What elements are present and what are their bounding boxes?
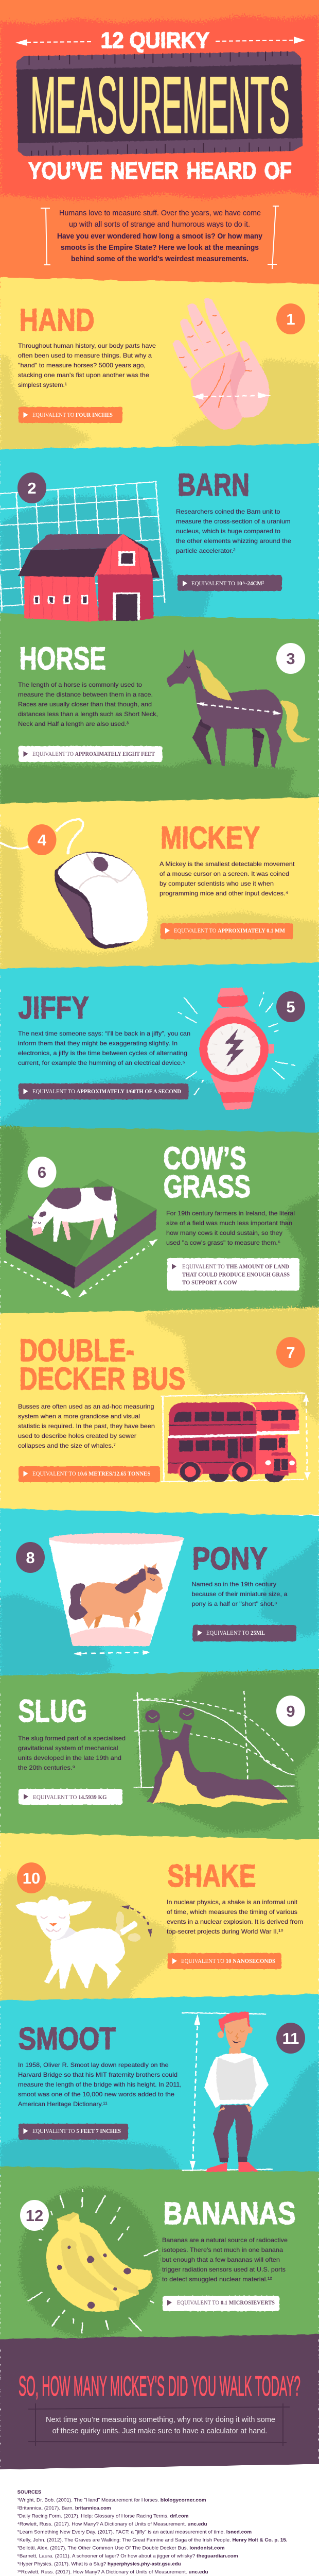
body text: often been used to measure things. But why a [18, 352, 152, 359]
heading: PONY [192, 1541, 268, 1576]
intro text block: up with all sorts of strange and humorous ways to do it. [69, 221, 250, 229]
badge: number 8: 8 [26, 1549, 35, 1567]
closing text: of these quirky units. Just make sure to have a calculator at hand. [52, 2427, 267, 2435]
body text: American Heritage Dictionary.¹¹ [18, 2100, 108, 2108]
body text: used "a cow's grass" to measure them.⁶ [166, 1239, 280, 1246]
body text: isotopes. There's not much in one banana [162, 2246, 283, 2253]
heading: BARN [178, 467, 250, 502]
callout: EQUIVALENT TO 10^-24CM² [191, 580, 264, 587]
heading: SHAKE [167, 1858, 256, 1893]
callout: EQUIVALENT TO 10 NANOSECONDS [181, 1957, 275, 1964]
badge: number 12 [20, 2200, 49, 2231]
body text [166, 1210, 295, 1246]
illustration: computer mouse [0, 819, 148, 949]
body text: For 19th century farmers in Ireland, the literal [166, 1210, 295, 1217]
body text: inform them that they might be exaggerating slightly. In [18, 1040, 178, 1047]
callout [19, 407, 122, 423]
badge: number 10 [17, 1862, 46, 1893]
body text: Named so in the 19th century [191, 1581, 276, 1588]
sources list: ²Britannica. (2017). Barn. britannica.com [17, 2505, 111, 2511]
body text: The slug formed part of a specialised [18, 1735, 126, 1742]
sources list: ⁷Bellotti, Alex. (2017). The Other Common Use Of The Double Decker Bus. londonist.com [17, 2546, 225, 2551]
body text [18, 342, 156, 388]
badge: number 6 [28, 1157, 57, 1188]
body text: Bananas are a natural source of radioactive [162, 2236, 288, 2244]
badge: number 6: 6 [38, 1163, 46, 1181]
intro text block: behind some of the world's weirdest measurements. [71, 255, 249, 263]
badge: number 2: 2 [27, 479, 37, 497]
heading: SLUG [19, 1693, 87, 1728]
body text: of time, which measures the timing of various [167, 1908, 297, 1916]
badge: number 4 [28, 824, 57, 855]
text frame [28, 2403, 290, 2446]
badge: number 5: 5 [286, 998, 295, 1016]
body text: system when a more grandiose and visual [18, 1413, 140, 1420]
badge: number 7: 7 [286, 1344, 295, 1362]
callout [19, 746, 163, 762]
body text: statistic is required. In the past, they have been [18, 1422, 155, 1430]
closing text: Next time you’re measuring something, why not try doing it with some [46, 2415, 275, 2424]
intro text block: Humans love to measure stuff. Over the years, we have come [59, 209, 261, 217]
callout [19, 2124, 128, 2140]
body text: Researchers coined the Barn unit to [176, 508, 280, 515]
body text [18, 2061, 182, 2108]
callout: EQUIVALENT TO APPROXIMATELY 1/60TH OF A SECOND [32, 1088, 181, 1095]
body text: by computer scientists who use it when [160, 880, 274, 887]
badge: number 4: 4 [38, 831, 47, 849]
sources list: ⁵Learn Something New Every Day. (2017). FACT: a "jiffy" is an actual measurement of time. lsned.com [17, 2530, 252, 2535]
body text: The length of a horse is commonly used to [18, 681, 142, 688]
body text: used to describe holes created by sewer [18, 1432, 136, 1439]
body text: nucleus, which is huge compared to [176, 528, 280, 535]
illustration: lamb [15, 1896, 152, 1989]
panel: horse [18, 641, 310, 768]
body text: distances less than a length such as Short Neck, [18, 710, 158, 718]
badge: number 2 [17, 472, 46, 503]
panel: slug [18, 1691, 305, 1807]
body text [191, 1581, 288, 1607]
callout: EQUIVALENT TO 5 FEET 7 INCHES [32, 2127, 121, 2134]
badge: number 9 [276, 1696, 305, 1726]
illustration: bananas [27, 2189, 158, 2333]
callout [178, 575, 282, 591]
badge: number 8 [16, 1542, 45, 1573]
callout: EQUIVALENT TO THE AMOUNT OF LAND [182, 1263, 289, 1270]
body text: electronics, a jiffy is the time between cycles of alternating [18, 1049, 187, 1057]
sources list: ⁴Rowlett, Russ. (2017). How Many? A Dictionary of Units of Measurement. unc.edu [17, 2521, 207, 2527]
body text: The next time someone says: “I’ll be back in a jiffy”, you can [18, 1030, 190, 1037]
callout [168, 1953, 281, 1969]
body text [18, 1403, 155, 1449]
body text: current, for example the humming of an electrical device.⁵ [18, 1059, 185, 1066]
body text: A Mickey is the smallest detectable movement [160, 860, 295, 868]
body text: measure the distance between them in a race. [18, 691, 153, 698]
callout: EQUIVALENT TO APPROXIMATELY EIGHT FEET [32, 750, 155, 757]
body text [18, 681, 158, 727]
body text [18, 1030, 190, 1066]
heading: DOUBLE- [20, 1333, 134, 1368]
body text: measure the cross-section of a uranium [176, 518, 291, 525]
body text: collapses and the size of whales.⁷ [18, 1442, 116, 1449]
intro text block [41, 206, 279, 269]
illustration: horse [167, 649, 310, 768]
body text: measure the length of the bridge with his height. In 2011, [18, 2081, 182, 2088]
body text: simplest system.¹ [18, 381, 67, 388]
callout [19, 1083, 188, 1099]
panel: mickey [0, 819, 295, 949]
body text: of a mouse cursor on a screen. It was coined [160, 870, 289, 877]
body text [160, 860, 295, 897]
illustration: cow on land [4, 1179, 157, 1297]
callout: EQUIVALENT TO 10.6 METRES/12.65 TONNES [32, 1470, 151, 1477]
body text: the 20th centuries.⁹ [18, 1764, 75, 1771]
callout [192, 1625, 296, 1641]
heading: MICKEY [161, 820, 260, 855]
body text [167, 1899, 303, 1935]
body text: In 1958, Oliver R. Smoot lay down repeatedly on the [18, 2061, 169, 2069]
body text [176, 508, 291, 554]
sources list [17, 2489, 288, 2576]
panel: cow's grass [4, 1141, 299, 1297]
body text: Neck and Half a length are also used.³ [18, 720, 129, 727]
panel: barn [0, 467, 291, 622]
badge: number 3 [276, 643, 305, 674]
illustration: smoot man with height arrow [182, 2011, 273, 2172]
sources list: ⁶Kelly, John. (2012). The Graves are Walking: The Great Famine and Saga of the Irish People. Henry Holt & Co. p. 15. [17, 2537, 288, 2543]
badge: number 11 [276, 2023, 305, 2054]
callout: EQUIVALENT TO FOUR INCHES [32, 411, 113, 418]
intro text block: smoots is the Empire State? Here we look at the meanings [61, 244, 259, 252]
body text: "hand" to measure horses? 5000 years ago, [18, 362, 146, 369]
panel: pony [16, 1533, 296, 1656]
panel: shake [15, 1858, 303, 1989]
body text: smoot was one of the 10,000 new words added to the [18, 2091, 174, 2098]
heading: JIFFY [19, 990, 89, 1025]
sources list: ⁹Hyper Physics. (2017). What is a Slug? hyperphysics.phy-astr.gsu.edu [17, 2562, 181, 2567]
callout: THAT COULD PRODUCE ENOUGH GRASS [182, 1270, 290, 1278]
callout [161, 923, 293, 939]
intro text block: Have you ever wondered how long a smoot is? Or how many [57, 232, 262, 241]
body text: In nuclear physics, a shake is an informal unit [167, 1899, 298, 1906]
sources list: SOURCES [17, 2489, 41, 2495]
heading: BANANAS [164, 2196, 295, 2231]
body text: top-secret projects during World War II.¹⁰ [167, 1928, 283, 1935]
callout [167, 1258, 299, 1291]
badge: number 11: 11 [282, 2029, 299, 2047]
callout [163, 2296, 279, 2311]
sources list: ¹⁰Rowlett, Russ. (2017). How Many? A Dictionary of Units of Measurement. unc.edu [17, 2569, 208, 2575]
panel: jiffy [18, 988, 305, 1110]
ruler panel [16, 51, 303, 156]
body text: trigger radiation sensors used at U.S. ports [162, 2266, 286, 2273]
badge: number 7 [276, 1337, 305, 1368]
body text: size of a field was much less important than [166, 1219, 292, 1227]
body text [18, 1735, 126, 1771]
heading: GRASS [164, 1169, 251, 1204]
icon: hand [173, 298, 271, 430]
badge: number 1 [276, 303, 305, 334]
closing text [46, 2415, 275, 2435]
body text: the other elements whizzing around the [176, 537, 291, 545]
body text: but enough that a few bananas will often [162, 2256, 280, 2263]
body text [162, 2236, 288, 2283]
body text: gravitational system of mechanical [18, 1744, 118, 1752]
panel: double-decker bus [18, 1333, 310, 1482]
sources list: ⁸Barnett, Laura. (2011). A schooner of lager? Or how about a jigger of whisky? theguardian.com [17, 2553, 238, 2559]
heading: SMOOT [19, 2021, 116, 2056]
body text: stacking one man's fist upon another was the [18, 371, 149, 379]
illustration: watch [178, 988, 295, 1110]
callout [19, 1466, 160, 1482]
badge: number 3: 3 [286, 650, 295, 668]
body text: how many cows it could sustain, so they [166, 1229, 282, 1236]
body text: because of their miniature size, a [191, 1590, 288, 1598]
heading: HAND [20, 302, 95, 337]
panel: closing message [19, 2370, 300, 2446]
heading: HORSE [20, 641, 106, 676]
body text: Harvard Bridge so that his MIT fraternity brothers could [18, 2071, 178, 2078]
title block [15, 28, 305, 184]
arrow: left dashed [15, 39, 94, 46]
panel: hand [18, 298, 305, 430]
title line: 12 quirky: 12 QUIRKY [101, 28, 209, 53]
body text: particle accelerator.² [176, 547, 236, 554]
body text: units developed in the late 19th and [18, 1754, 121, 1761]
callout: EQUIVALENT TO 14.5939 KG [33, 1793, 107, 1801]
body text: Busses are often used as an ad-hoc measuring [18, 1403, 154, 1410]
callout: EQUIVALENT TO 25ML [206, 1629, 265, 1636]
illustration: slug on graph [133, 1691, 295, 1807]
badge: number 12: 12 [26, 2207, 43, 2225]
callout [19, 1789, 122, 1805]
heading: COW’S [164, 1141, 246, 1176]
body text: Races are usually closer than that though, and [18, 701, 152, 708]
callout: EQUIVALENT TO APPROXIMATELY 0.1 MM [174, 927, 285, 934]
illustration: barn with grid [0, 481, 165, 622]
body text: Throughout human history, our body parts have [18, 342, 156, 349]
badge: number 1: 1 [286, 310, 295, 328]
body text: pony is a half or "short" shot.⁸ [191, 1600, 277, 1607]
arrow: right dashed [216, 37, 305, 44]
heading [20, 1333, 185, 1396]
illustration: bus [161, 1393, 310, 1482]
sources list: ³Daily Racing Form. (2017). Help: Glossary of Horse Racing Terms. drf.com [17, 2514, 189, 2519]
callout: EQUIVALENT TO 0.1 MICROSIEVERTS [177, 2299, 275, 2306]
panel: bananas [20, 2189, 295, 2333]
panel: smoot [18, 2021, 305, 2140]
heading: DECKER BUS [20, 1361, 185, 1396]
badge: number 10: 10 [23, 1869, 40, 1887]
body text: to detect smuggled nuclear material.¹² [162, 2276, 272, 2283]
callout: TO SUPPORT A COW [182, 1279, 237, 1286]
body text: programming mice and other input devices.⁴ [160, 890, 288, 897]
illustration: pony in shot glass [49, 1533, 184, 1656]
sources list: ¹Wright, Dr. Bob. (2001). The "Hand" Measurement for Horses. biologycorner.com [17, 2498, 206, 2503]
badge: number 9: 9 [286, 1702, 295, 1720]
body text: events in a nuclear explosion. It is derived from [167, 1918, 303, 1925]
heading [164, 1141, 251, 1204]
badge: number 5 [276, 991, 305, 1022]
